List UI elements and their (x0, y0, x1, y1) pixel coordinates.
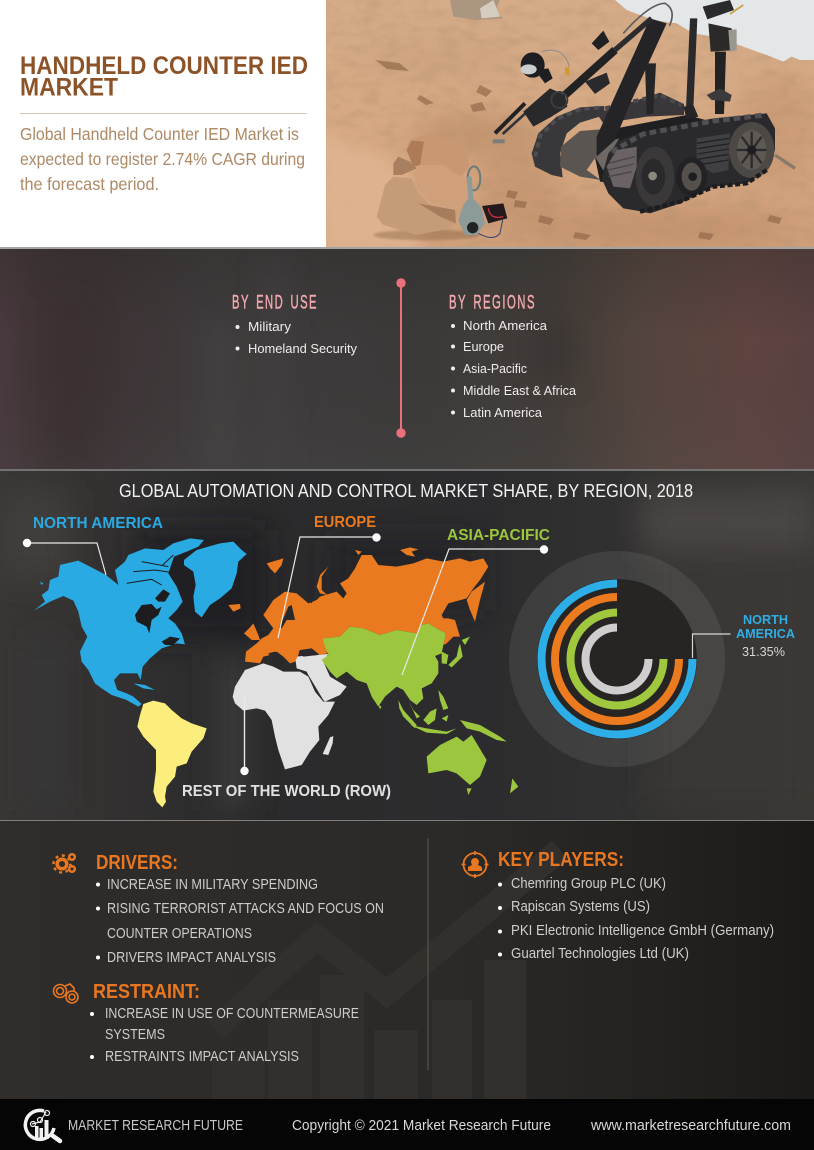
list: drivers: DRIVERS IMPACT ANALYSIS (107, 949, 276, 966)
timeline divider (396, 278, 406, 438)
list: restraint: RESTRAINTS IMPACT ANALYSIS (105, 1048, 299, 1065)
map: europe and russia (244, 547, 488, 663)
list: regions: Asia-Pacific (463, 361, 527, 376)
label: asia-pacific with leader: ASIA-PACIFIC (447, 527, 550, 544)
photo: bomb disposal robot on sand (318, 0, 814, 255)
panel: drivers, restraint and key players (0, 821, 814, 1099)
panel: header white background (0, 0, 326, 247)
icon: key players target (462, 851, 488, 878)
title (20, 52, 308, 102)
list: regions: Latin America (463, 405, 543, 420)
list: regions: North America (463, 318, 548, 333)
map: south america (137, 701, 207, 807)
list: key players (498, 875, 774, 962)
icon: gears (54, 854, 75, 872)
list: restraint: INCREASE IN USE OF COUNTERMEASURE (105, 1005, 359, 1022)
panel: footer (0, 1099, 814, 1150)
panel: regional market share (0, 471, 814, 820)
intro text block: Global Handheld Counter IED Market is (20, 124, 299, 144)
list: regions: Middle East & Africa (463, 383, 577, 398)
far track (597, 93, 684, 123)
label: europe with leader: EUROPE (314, 514, 376, 531)
heading: by end use: BY END USE (232, 292, 318, 314)
list: key players: Chemring Group PLC (UK) (511, 875, 666, 892)
list: end use: Military (248, 319, 292, 334)
callout: north america share: NORTH (743, 612, 788, 627)
label: asia-pacific with leader (402, 527, 550, 675)
list: regions (451, 318, 577, 420)
heading: key players: KEY PLAYERS: (498, 848, 624, 871)
map: north america (34, 538, 247, 707)
list: drivers: RISING TERRORIST ATTACKS AND FOCUS ON (107, 900, 384, 917)
heading: by regions: BY REGIONS (449, 292, 536, 314)
front track (602, 113, 775, 213)
label: north america with leader: NORTH AMERICA (33, 515, 163, 532)
label: rest of the world with leader (182, 695, 391, 800)
map: rest of the world (233, 654, 347, 769)
masts (645, 63, 656, 115)
heading: restraint: RESTRAINT: (93, 980, 200, 1003)
label: north america with leader (23, 515, 163, 575)
list: end use (236, 319, 357, 356)
list: key players: Rapiscan Systems (US) (511, 898, 650, 915)
radial bar chart (509, 551, 725, 767)
callout: north america share: 31.35% (742, 644, 785, 659)
map: asia pacific (322, 623, 518, 795)
intro text block: expected to register 2.74% CAGR during (20, 149, 305, 169)
list: restraint (90, 1005, 359, 1065)
callout: north america share: AMERICA (736, 626, 796, 641)
body (595, 115, 706, 182)
callout: north america share (692, 612, 796, 659)
list: drivers (96, 876, 384, 966)
list: drivers: COUNTER OPERATIONS (107, 925, 252, 942)
world map (34, 538, 518, 807)
heading: market share: GLOBAL AUTOMATION AND CONTROL MARKET SHARE, BY REGION, 2018 (119, 481, 693, 501)
arm (597, 18, 667, 157)
list: drivers: INCREASE IN MILITARY SPENDING (107, 876, 318, 893)
baltic and black seas (268, 597, 318, 662)
footer brand: MARKET RESEARCH FUTURE (68, 1117, 243, 1134)
label: europe with leader (278, 514, 381, 638)
footer website: www.marketresearchfuture.com (590, 1117, 791, 1134)
map: iceland (228, 604, 241, 612)
title: MARKET (20, 74, 118, 102)
list: restraint: SYSTEMS (105, 1026, 165, 1043)
hudson bay and channels (127, 555, 180, 645)
heading: drivers: DRIVERS: (96, 852, 178, 874)
title: HANDHELD COUNTER IED (20, 52, 308, 80)
list: key players: Guartel Technologies Ltd (UK) (511, 945, 689, 962)
sky and robot in zoom coordinates (450, 0, 814, 213)
rear left track (532, 106, 605, 177)
icon: handcuffs (54, 984, 78, 1003)
label: rest of the world with leader: REST OF THE WORLD (ROW) (182, 783, 391, 800)
intro text block (20, 124, 305, 194)
list: regions: Europe (463, 339, 504, 354)
icon: market research future logo (25, 1110, 60, 1141)
list: key players: PKI Electronic Intelligence GmbH (Germany) (511, 922, 774, 939)
list: end use: Homeland Security (248, 341, 357, 356)
rocks and device in zoom coordinates (373, 133, 507, 240)
intro text block: the forecast period. (20, 174, 159, 194)
panel: segmentation (0, 249, 814, 470)
footer copyright: Copyright © 2021 Market Research Future (292, 1117, 551, 1134)
